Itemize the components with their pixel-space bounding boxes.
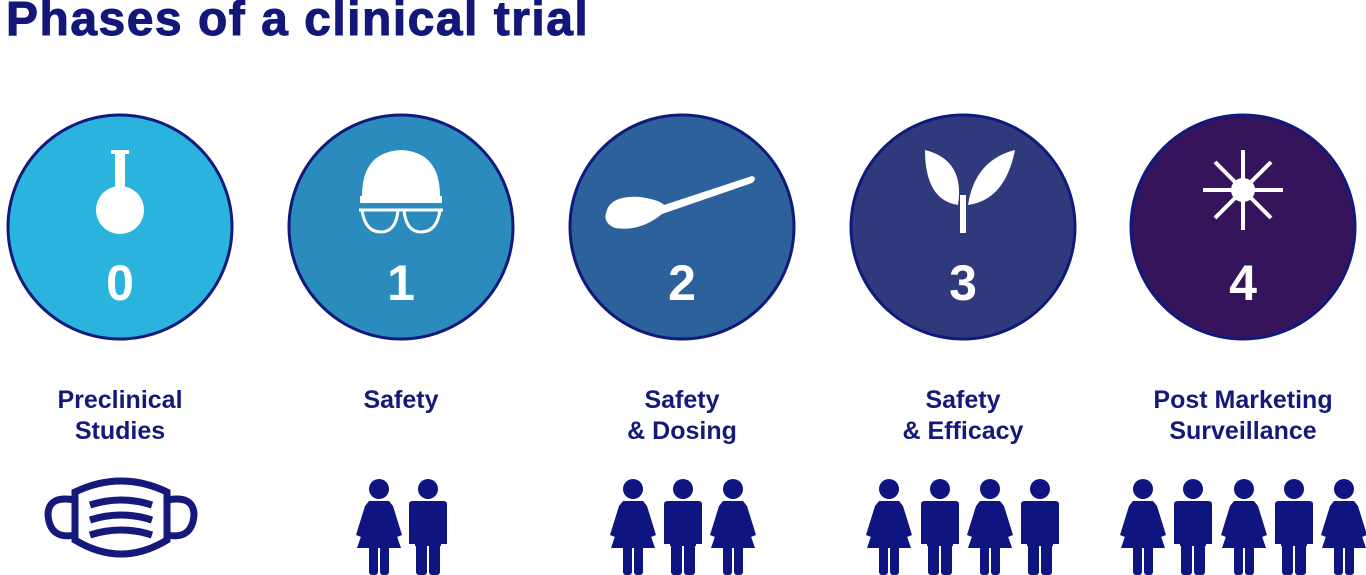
icon: flask	[96, 150, 144, 234]
label: post marketing: Surveillance	[1169, 417, 1317, 445]
label: safety dosing: & Dosing	[627, 417, 737, 445]
phase 0 circle	[8, 115, 232, 339]
phase 3 circle: 3	[949, 255, 977, 311]
phase 1 circle: 1	[387, 255, 415, 311]
label: safety efficacy	[903, 386, 1024, 445]
label: safety dosing	[627, 386, 737, 445]
phase 2 circle	[570, 115, 794, 339]
phase 0 circle: 0	[106, 255, 134, 311]
icon: arrows burst	[1203, 150, 1283, 230]
icon: leaves	[925, 150, 1015, 233]
icon: spoon	[605, 176, 755, 229]
label: safety efficacy: & Efficacy	[903, 417, 1023, 445]
phase 1 circle	[289, 115, 513, 339]
people groups	[356, 479, 1366, 575]
label: safety: Safety	[363, 386, 439, 414]
label: preclinical: Preclinical	[57, 386, 183, 414]
phase 2 circle: 2	[668, 255, 696, 311]
label: post marketing	[1153, 386, 1333, 445]
label: safety efficacy: Safety	[925, 386, 1001, 414]
phase 3 circle	[851, 115, 1075, 339]
phase 4 circle	[1131, 115, 1355, 339]
label: preclinical	[57, 386, 183, 445]
label: safety dosing: Safety	[644, 386, 720, 414]
icon: helmet and goggles	[359, 150, 443, 232]
icon: face mask	[48, 481, 194, 554]
label: post marketing: Post Marketing	[1153, 386, 1333, 414]
label: preclinical: Studies	[75, 417, 165, 445]
phase 4 circle: 4	[1229, 255, 1257, 311]
